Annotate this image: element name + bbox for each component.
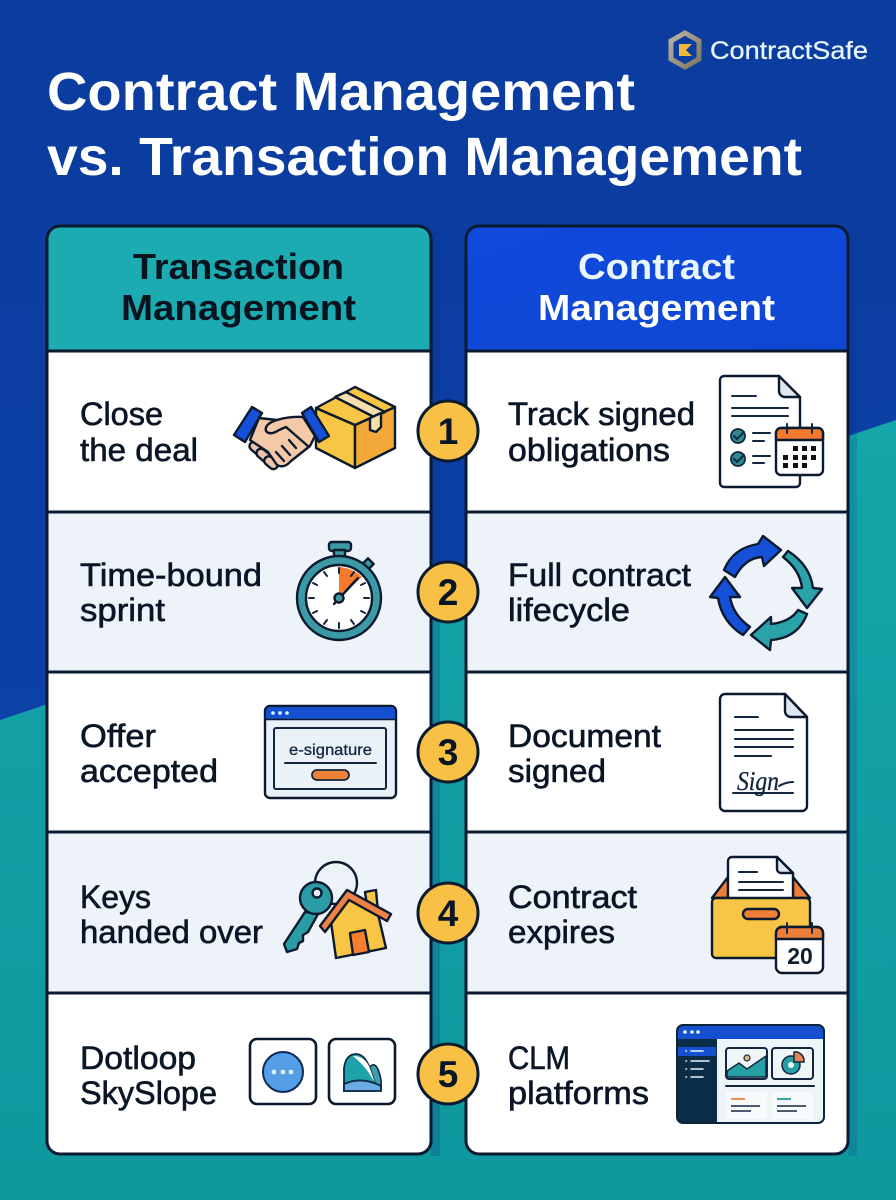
icon: signed document <box>720 694 807 811</box>
number badge 4: 4 <box>438 893 459 934</box>
row text: Document signed <box>508 718 661 789</box>
panel header: Transaction Management <box>47 226 431 351</box>
title <box>47 62 802 187</box>
icon: lifecycle arrows <box>710 536 822 650</box>
icon: e-signature window <box>265 706 396 798</box>
row text: Close the deal: the deal <box>80 432 198 468</box>
row text: Full contract lifecycle: Full contract <box>508 557 691 593</box>
row text: CLM platforms: CLM <box>508 1040 570 1076</box>
row text: Offer accepted <box>80 718 218 789</box>
panel header: Transaction Management: Transaction <box>133 246 344 287</box>
row text: Close the deal: Close <box>80 396 163 432</box>
number badge 1 <box>418 401 478 461</box>
number badge 4 <box>418 883 478 943</box>
panel header: Transaction Management: Management <box>121 287 356 328</box>
row text: Full contract lifecycle <box>508 557 691 628</box>
icon: e-signature window: e-signature <box>289 742 372 759</box>
icon: archive box with calendar <box>712 857 823 973</box>
icon: package box <box>316 387 395 468</box>
row text: Keys handed over: handed over <box>80 914 263 950</box>
row text: CLM platforms: platforms <box>508 1075 649 1111</box>
row text: Offer accepted: accepted <box>80 753 218 789</box>
panel: Transaction Management <box>47 226 431 1154</box>
icon: CLM dashboard <box>677 1025 824 1123</box>
row text: Contract expires: expires <box>508 914 615 950</box>
panel header: Contract Management: Management <box>538 287 775 328</box>
row text: Time-bound sprint: sprint <box>80 592 165 628</box>
row text: Track signed obligations: obligations <box>508 432 670 468</box>
row text: Keys handed over: Keys <box>80 879 151 915</box>
row text: Document signed: Document <box>508 718 661 754</box>
number badge 5 <box>418 1044 478 1104</box>
icon: signed document: Sign <box>737 766 779 796</box>
title: vs. Transaction Management <box>47 127 802 187</box>
logo: ContractSafe <box>671 33 868 67</box>
number badge 3: 3 <box>438 732 458 773</box>
logo: ContractSafe: ContractSafe <box>710 37 868 65</box>
number badge 3 <box>418 722 478 782</box>
row text: Full contract lifecycle: lifecycle <box>508 592 630 628</box>
row text: CLM platforms <box>508 1040 649 1111</box>
icon: archive box with calendar: 20 <box>787 943 813 969</box>
row text: Dotloop SkySlope: SkySlope <box>80 1075 217 1111</box>
number badge 2 <box>418 562 478 622</box>
icon: SkySlope app <box>329 1039 395 1104</box>
row text: Dotloop SkySlope: Dotloop <box>80 1040 196 1076</box>
row text: Time-bound sprint <box>80 557 262 628</box>
panel: Contract Management <box>466 226 848 1154</box>
row text: Keys handed over <box>80 879 263 950</box>
number badge 2: 2 <box>438 572 458 613</box>
icon: handshake <box>234 407 329 471</box>
row text: Offer accepted: Offer <box>80 718 156 754</box>
row text: Track signed obligations <box>508 396 695 468</box>
row text: Dotloop SkySlope <box>80 1040 217 1111</box>
row text: Contract expires: Contract <box>508 879 637 915</box>
row text: Contract expires <box>508 879 637 950</box>
row text: Time-bound sprint: Time-bound <box>80 557 262 593</box>
icon: document with calendar <box>720 376 823 487</box>
row text: Document signed: signed <box>508 753 606 789</box>
row text: Close the deal <box>80 396 198 468</box>
number badge 1: 1 <box>438 411 458 452</box>
title: Contract Management <box>47 62 635 122</box>
number badge 5: 5 <box>438 1054 458 1095</box>
icon: stopwatch <box>297 542 381 640</box>
icon: house key <box>284 862 391 958</box>
icon: Dotloop app <box>250 1039 316 1104</box>
panel header: Contract Management: Contract <box>578 246 735 287</box>
panel header: Contract Management <box>466 226 848 351</box>
row text: Track signed obligations: Track signed <box>508 396 695 432</box>
